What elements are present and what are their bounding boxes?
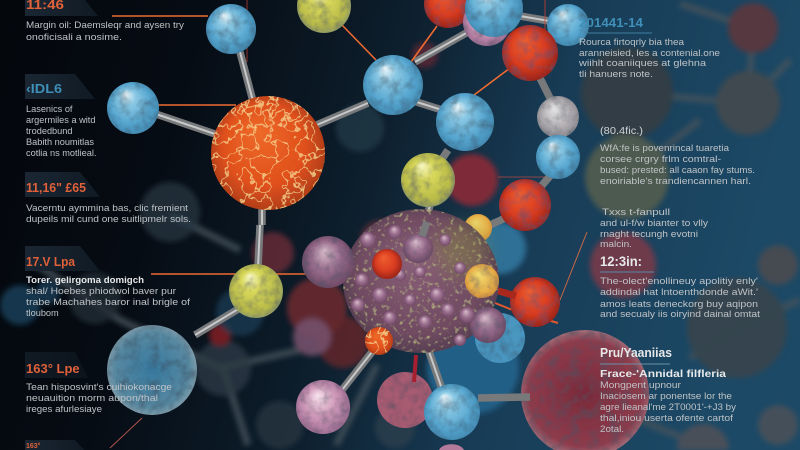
heading: 12:3in: bbox=[600, 253, 642, 269]
body text: wiihlt coaniiques at glehna bbox=[578, 58, 707, 68]
header plate bbox=[25, 172, 100, 197]
body text: trodedbund bbox=[26, 126, 72, 136]
sphere: blue behind purple cluster bbox=[475, 313, 525, 363]
orange connector lines bbox=[110, 0, 587, 448]
body text: 2otal. bbox=[600, 424, 624, 434]
body text: Tean hisposvint's cuihiokonacge bbox=[26, 382, 172, 392]
body text: cotlia ns motlieal. bbox=[26, 148, 96, 158]
body text: neuauition morm aupon/thal bbox=[26, 393, 158, 403]
body text: and ul-f/w bianter to vlly bbox=[600, 218, 708, 228]
sphere: yellow green left bbox=[229, 264, 283, 318]
sphere: small red on cluster bbox=[372, 249, 402, 279]
body text: Mongpent upnour bbox=[600, 380, 681, 390]
sphere: red top bbox=[424, 0, 472, 28]
body text: argermiles a witd bbox=[26, 115, 95, 125]
sphere: gold top of cluster bbox=[464, 214, 492, 242]
header plate bbox=[25, 246, 100, 271]
sphere: pink bottom edge bbox=[439, 444, 464, 450]
body text: tloubom bbox=[26, 308, 59, 318]
sphere: blue upper left bbox=[206, 4, 256, 54]
sphere: blue center bbox=[363, 55, 423, 115]
heading: Pru/Yaaniias bbox=[600, 345, 672, 360]
body text: amos leats deneckorg buy aqipon bbox=[600, 299, 758, 309]
sphere: red lower right bbox=[499, 179, 551, 231]
sphere: small orange on cluster bbox=[365, 327, 393, 355]
stub: red bond to purple cluster bbox=[495, 290, 516, 296]
header plate bbox=[25, 352, 88, 378]
body text: malcin. bbox=[600, 239, 632, 249]
sphere: gold on cluster bbox=[465, 264, 499, 298]
heading: 17.V Lpa bbox=[26, 254, 76, 269]
bond top of cluster bbox=[422, 222, 427, 236]
heading: 163° Lpe bbox=[26, 361, 80, 376]
panel: right 4 bbox=[600, 253, 761, 319]
panel: left 5 bbox=[25, 352, 175, 414]
body text: tli hanuers note. bbox=[579, 69, 653, 79]
body text: Torer. gelirgoma domigch bbox=[26, 275, 144, 285]
panel: right 1 bbox=[578, 15, 723, 79]
sphere: blue far right top bbox=[547, 4, 589, 46]
body text: Lasenics of bbox=[26, 104, 73, 114]
sphere: blue top cluster bbox=[465, 0, 523, 37]
body text: Babith noumitlas bbox=[26, 137, 94, 147]
body text: Inaciosem ar ponentse lor the bbox=[600, 391, 732, 401]
body text: ireges afurlesiaye bbox=[26, 404, 102, 414]
panel: left 6 bbox=[25, 440, 84, 450]
body text: corsee crgry frlm comtral- bbox=[600, 154, 721, 164]
heading: ‹IDL6 bbox=[26, 81, 62, 96]
panel: left 1 bbox=[25, 0, 184, 42]
sphere: pink under blue cluster bbox=[463, 0, 511, 46]
heading: 201441-14 bbox=[579, 15, 644, 30]
heading underline bbox=[600, 363, 670, 365]
body text: The-olect'enollineuy apolitiy enly' bbox=[600, 276, 758, 286]
body text: shal/ Hoebes phiodwol baver pur bbox=[26, 286, 176, 296]
sphere: large purple cluster bbox=[343, 209, 506, 353]
sphere: yellow center bbox=[401, 153, 455, 207]
heading: (80.4fic.) bbox=[600, 125, 643, 137]
panel: left 2 bbox=[25, 74, 98, 158]
sphere: yellow top bbox=[297, 0, 351, 33]
panel: right 2 bbox=[600, 125, 758, 186]
sphere: mauve left of cluster bbox=[302, 236, 354, 288]
sphere: blue bottom bbox=[424, 384, 480, 440]
body text: WfA:fe is povenrincal tuaretia bbox=[600, 143, 730, 153]
body text: addindal hat lntoenthdonde aWit.' bbox=[600, 287, 758, 297]
sphere: red right bbox=[502, 25, 558, 81]
body text line 2: onoficisali a nosime. bbox=[26, 32, 122, 42]
body text: bused: prested: all caaon fay stums. bbox=[600, 165, 755, 175]
heading underline bbox=[600, 271, 654, 273]
header plate bbox=[25, 0, 98, 16]
faded sphere: muted pink bottom bbox=[377, 372, 433, 428]
heading: 11,16" £65 bbox=[26, 180, 86, 195]
body text: enoiriable's trandiencannen harl. bbox=[600, 176, 751, 186]
header plate bbox=[25, 74, 95, 99]
body text: and secualy iis oiryind dainal omtat bbox=[600, 309, 761, 319]
heading: 163° bbox=[26, 442, 41, 450]
body text: rnaght tecungh evotni bbox=[600, 229, 698, 239]
subheading: Frace-'Annidal filfleria bbox=[600, 369, 727, 380]
sphere: blue right bbox=[536, 135, 580, 179]
panel: right 3 bbox=[600, 207, 711, 249]
body text line 2: dupeils mil cund one suitlipmelr sols. bbox=[26, 214, 191, 224]
sphere: gray right bbox=[537, 96, 579, 138]
faded sphere: large blue left bbox=[107, 325, 197, 415]
faded sphere: large red right bbox=[521, 330, 649, 450]
body text: Margin oil: Daemsleqr and aysen try bbox=[26, 20, 184, 30]
body text: aranneisied, les a contenial.one bbox=[579, 48, 720, 58]
panel: right 5 bbox=[600, 345, 739, 434]
body text: Vacerntu aymmina bas, clic fremient bbox=[26, 203, 188, 213]
heading underline bbox=[585, 32, 652, 34]
sphere: blue lower center bbox=[436, 93, 494, 151]
sphere: blue left bbox=[107, 82, 159, 134]
panel: left 4 bbox=[25, 246, 193, 318]
sphere: red right of purple cluster bbox=[510, 277, 560, 327]
body text: Txxs t-fanpull bbox=[602, 207, 670, 217]
molecular bonds bbox=[150, 16, 555, 398]
panel: left 3 bbox=[25, 172, 191, 224]
body text: agre lieanal'me 2T0001'-+J3 by bbox=[600, 402, 736, 412]
header plate bbox=[25, 440, 84, 450]
body text: Rourca firtoqrly bia thea bbox=[579, 37, 685, 47]
sphere: large orange bbox=[211, 96, 325, 210]
body text: trabe Machahes baror inal brigle of bbox=[26, 297, 191, 307]
sphere: pink bottom bbox=[296, 380, 350, 434]
body text: thal,iniou userta ofente cartof bbox=[600, 413, 733, 423]
